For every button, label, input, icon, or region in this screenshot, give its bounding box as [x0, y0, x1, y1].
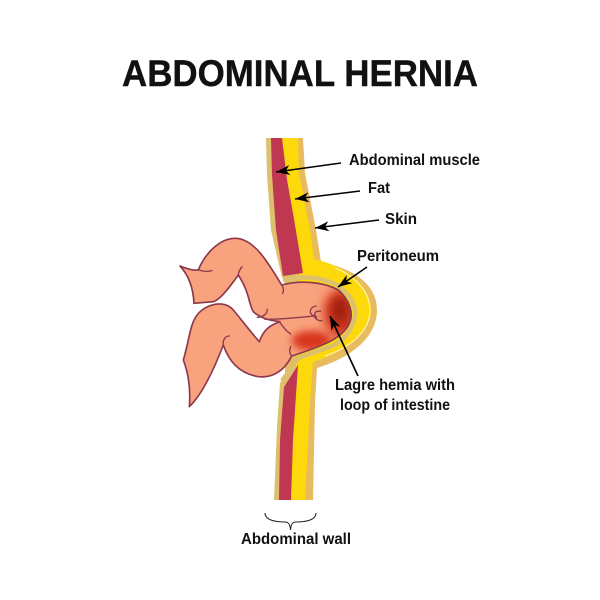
intestine fold lines [198, 267, 322, 356]
label: abdominal muscle: Abdominal muscle [349, 152, 480, 169]
hernia red glow [292, 288, 360, 351]
label: peritoneum: Peritoneum [357, 248, 439, 265]
peritoneum [282, 277, 355, 381]
label: abdominal wall: Abdominal wall [241, 531, 351, 548]
skin layer [284, 138, 377, 500]
outer wall tan lower [274, 360, 300, 500]
abdominal muscle layer lower [279, 365, 298, 500]
label: large hernia: Lagre hemia with [335, 377, 455, 394]
arrow: skin [315, 220, 379, 228]
abdominal muscle layer [271, 138, 303, 276]
arrow: abdominal muscle [276, 163, 341, 172]
fat layer [282, 138, 371, 500]
arrow: peritoneum [338, 267, 367, 287]
label: fat: Fat [368, 180, 390, 197]
label: skin: Skin [385, 211, 417, 228]
title: ABDOMINAL HERNIA [122, 53, 478, 94]
label: large hernia [335, 377, 455, 414]
outer wall tan upper [266, 138, 292, 278]
arrow: fat [295, 191, 360, 199]
intestine loop [180, 238, 360, 407]
white line in bulge [325, 268, 370, 356]
brace [265, 513, 316, 530]
abdominal wall diagram [266, 138, 377, 500]
arrow: hernia [330, 316, 358, 376]
intestine outline [180, 238, 351, 407]
intestine body [180, 238, 351, 407]
label: large hernia: loop of intestine [340, 397, 450, 414]
